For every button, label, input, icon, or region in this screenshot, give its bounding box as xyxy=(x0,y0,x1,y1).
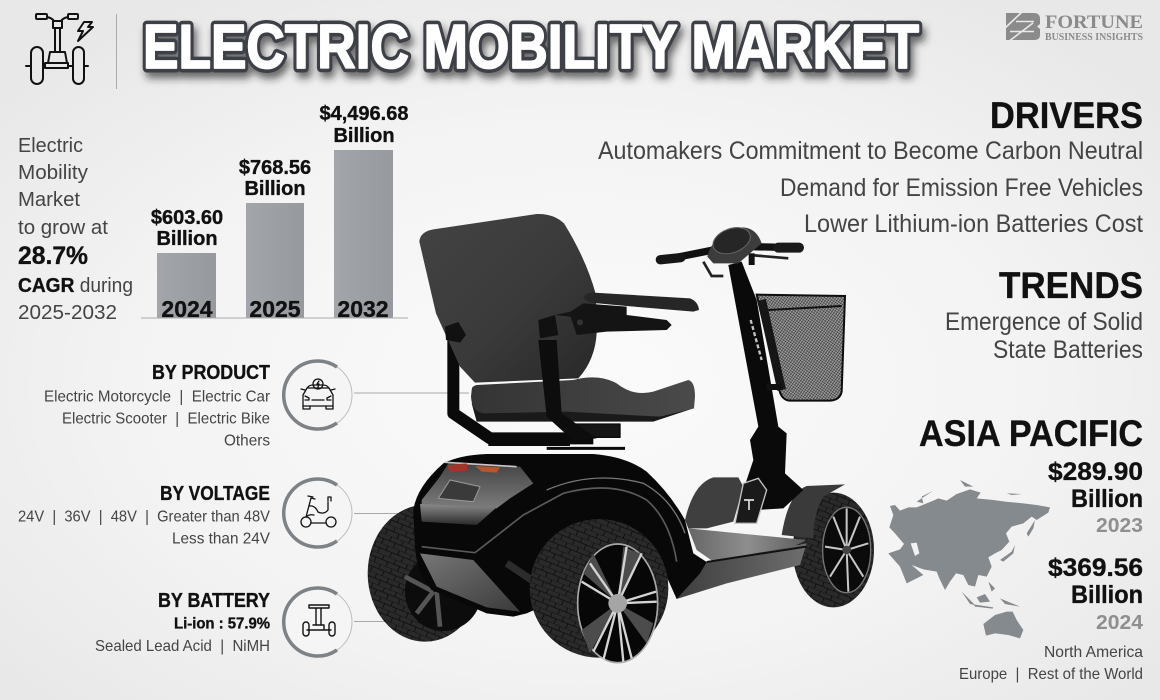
bar 2025: 2025 xyxy=(249,296,301,322)
bar 2032 xyxy=(320,103,408,322)
seat cushion xyxy=(471,377,695,417)
frame brackets xyxy=(445,315,558,343)
stat: 2024 xyxy=(1048,554,1144,634)
other regions: North America xyxy=(1044,644,1143,661)
front fenders xyxy=(685,477,845,538)
drivers list xyxy=(598,137,1143,238)
bar 2024: $603.60 xyxy=(151,207,223,229)
icon: car in ring xyxy=(284,361,352,429)
connector lines xyxy=(354,392,469,622)
text block: CAGR summary: Mobility xyxy=(18,162,88,184)
panel: by battery: BY BATTERY xyxy=(158,590,271,612)
title: ELECTRIC MOBILITY MARKET xyxy=(143,13,919,82)
text block: CAGR summary: 28.7% xyxy=(18,242,88,270)
trends list: State Batteries xyxy=(993,336,1143,364)
panel: by product: Electric Scooter | Electric Bike xyxy=(62,410,270,428)
tail lights xyxy=(447,463,500,473)
bar 2025: $768.56 xyxy=(239,157,311,179)
bar chart xyxy=(141,103,408,322)
panel: by product xyxy=(44,362,271,450)
trends list xyxy=(945,308,1143,364)
text block: CAGR summary: 2025-2032 xyxy=(18,302,117,324)
panel: by battery xyxy=(95,590,271,655)
drivers list: Lower Lithium-ion Batteries Cost xyxy=(804,210,1143,238)
panel: by product: Electric Motorcycle | Electric Car xyxy=(44,388,271,406)
panel: by voltage: BY VOLTAGE xyxy=(160,483,270,505)
bar 2025: Billion xyxy=(244,178,306,200)
illustration: mobility scooter xyxy=(368,214,874,663)
text block: CAGR summary: to grow at xyxy=(18,217,108,239)
bar 2024: 2024 xyxy=(161,296,213,322)
battery console xyxy=(735,478,767,523)
seat back xyxy=(419,214,597,383)
bar 2025 xyxy=(239,157,311,322)
map: Asia Pacific xyxy=(888,480,1050,638)
bar 2032: Billion xyxy=(333,125,395,147)
icon: hoverboard in ring xyxy=(284,588,352,656)
armrest xyxy=(555,293,699,335)
bar 2024: Billion xyxy=(156,228,218,250)
text block: CAGR summary: Electric xyxy=(18,135,83,157)
title: ELECTRIC MOBILITY MARKET xyxy=(143,13,919,82)
panel: by battery: Li-ion : 57.9% xyxy=(174,616,270,632)
stat: 2024: $369.56 xyxy=(1048,554,1143,582)
panel: by product: Others xyxy=(224,432,270,450)
side frame upright xyxy=(538,340,597,441)
stat: 2024: Billion xyxy=(1071,581,1143,609)
text block: CAGR summary: Market xyxy=(18,189,80,211)
steering column and fork xyxy=(728,262,803,510)
footboard and side skirt xyxy=(673,528,807,599)
bar 2032: 2032 xyxy=(337,296,389,322)
trends heading: TRENDS xyxy=(999,265,1143,306)
trends list: Emergence of Solid xyxy=(945,308,1143,336)
near rear wheel xyxy=(530,519,668,663)
far rear wheel xyxy=(368,505,482,642)
icon: e-scooter in ring xyxy=(284,479,352,547)
far front wheel xyxy=(793,493,874,607)
other regions xyxy=(959,644,1143,683)
bar 2024 xyxy=(151,207,223,322)
asia pacific heading: ASIA PACIFIC xyxy=(919,413,1143,454)
text block: CAGR summary xyxy=(18,135,133,324)
panel: by product: BY PRODUCT xyxy=(152,362,270,384)
stat: 2024: 2024 xyxy=(1096,612,1144,634)
panel: by voltage: Less than 24V xyxy=(172,530,270,548)
panel: by voltage xyxy=(18,483,270,548)
divider xyxy=(116,14,117,89)
stat: 2023: Billion xyxy=(1071,485,1143,513)
panel: by voltage: 24V | 36V | 48V | Greater than 48V xyxy=(18,508,270,526)
seat underside xyxy=(472,403,693,422)
panel: by battery: Sealed Lead Acid | NiMH xyxy=(95,638,270,655)
icon: electric scooter xyxy=(26,14,93,84)
drivers heading: DRIVERS xyxy=(990,95,1143,136)
logo: Fortune Business Insights: FORTUNE xyxy=(1045,13,1143,33)
stat: 2023: $289.90 xyxy=(1048,458,1143,486)
stat: 2023 xyxy=(1048,458,1143,537)
other regions: Europe | Rest of the World xyxy=(959,666,1143,683)
seat frame xyxy=(453,332,625,448)
basket xyxy=(757,295,845,401)
handlebars and display xyxy=(655,223,804,276)
logo: Fortune Business Insights xyxy=(1004,12,1143,43)
logo: Fortune Business Insights: BUSINESS INSIGHTS xyxy=(1045,32,1143,43)
main body shell xyxy=(413,454,707,617)
stat: 2023: 2023 xyxy=(1096,515,1143,537)
text block: CAGR summary: CAGR during xyxy=(18,275,133,297)
bar 2032: $4,496.68 xyxy=(320,103,408,125)
